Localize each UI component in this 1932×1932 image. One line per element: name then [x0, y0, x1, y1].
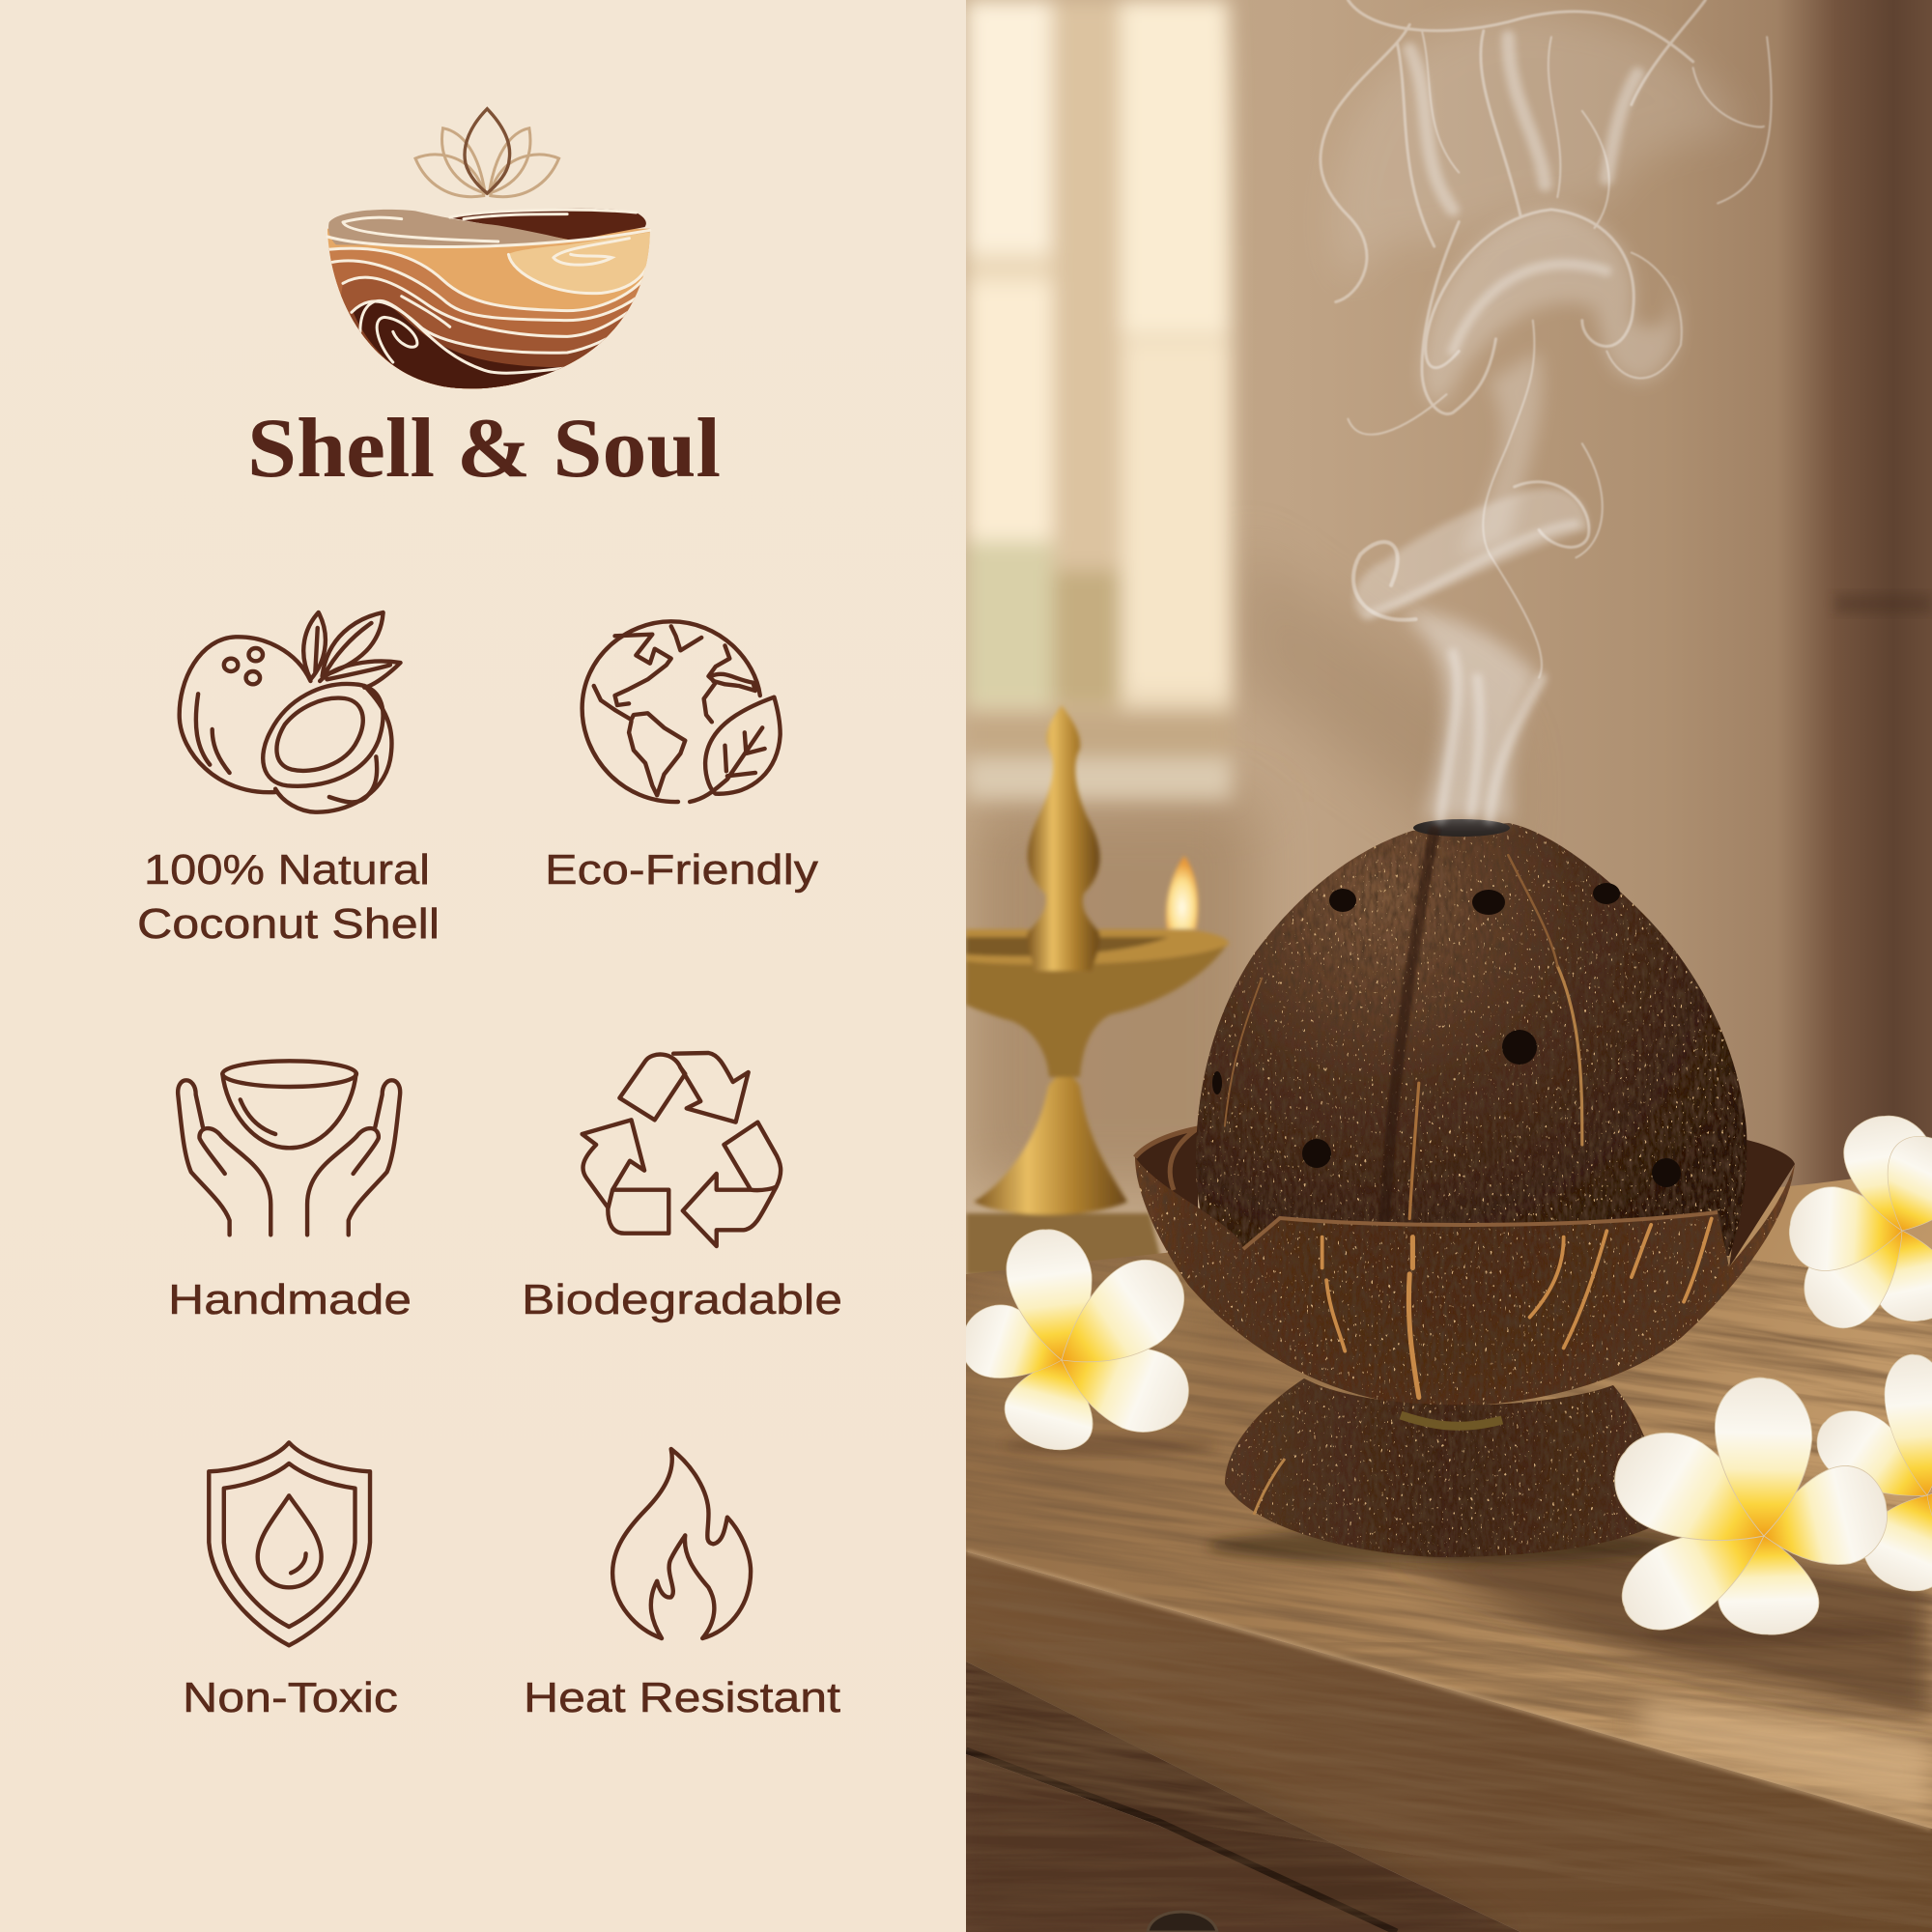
- label: Biodegradable: [522, 1276, 842, 1323]
- label: 100% Natural: [144, 846, 430, 894]
- coconut censer: [1135, 819, 1795, 1563]
- frangipani flower right edge: [1804, 1351, 1932, 1603]
- icon: recycling arrows: [582, 1053, 781, 1246]
- dome fibres: [1225, 831, 1582, 1218]
- top vent hole: [1413, 819, 1510, 837]
- icon: hands holding bowl: [178, 1061, 400, 1235]
- table: [966, 1150, 1932, 1932]
- cup fibres: [1322, 1218, 1712, 1397]
- panel: product photo scene: [952, 0, 1932, 1932]
- icon: globe with leaf: [582, 621, 781, 802]
- dome: [1196, 823, 1747, 1256]
- cup back: [1135, 1128, 1795, 1267]
- label: Handmade: [168, 1276, 412, 1323]
- brass oil lamp: [966, 705, 1229, 1275]
- window with light: [966, 0, 1233, 799]
- wall background: [966, 0, 1932, 1352]
- frangipani flower left: [952, 1224, 1216, 1459]
- icon: flame: [612, 1449, 751, 1638]
- smoke plume: [1321, 0, 1772, 819]
- icon: coconut: [180, 612, 401, 812]
- label: Eco-Friendly: [545, 846, 818, 894]
- label: Non-Toxic: [183, 1674, 398, 1721]
- icon: drawer knob: [1148, 1912, 1217, 1932]
- dome vent holes: [1212, 883, 1681, 1187]
- frangipani flower right top: [1786, 1109, 1932, 1344]
- icon: lamp flame: [1166, 856, 1198, 929]
- logo: lotus above wooden bowl: [326, 109, 653, 393]
- panel: brand and benefits: [139, 106, 840, 1713]
- label: Coconut Shell: [137, 900, 440, 948]
- base: [1225, 1378, 1663, 1557]
- icon: shield with drop: [209, 1442, 370, 1645]
- label: Heat Resistant: [524, 1674, 840, 1721]
- title: Shell & Soul: [247, 402, 721, 496]
- frangipani flower front: [1597, 1377, 1918, 1645]
- cup front: [1135, 1157, 1795, 1406]
- icon: lotus: [415, 109, 559, 197]
- icon: bowl: [326, 209, 653, 393]
